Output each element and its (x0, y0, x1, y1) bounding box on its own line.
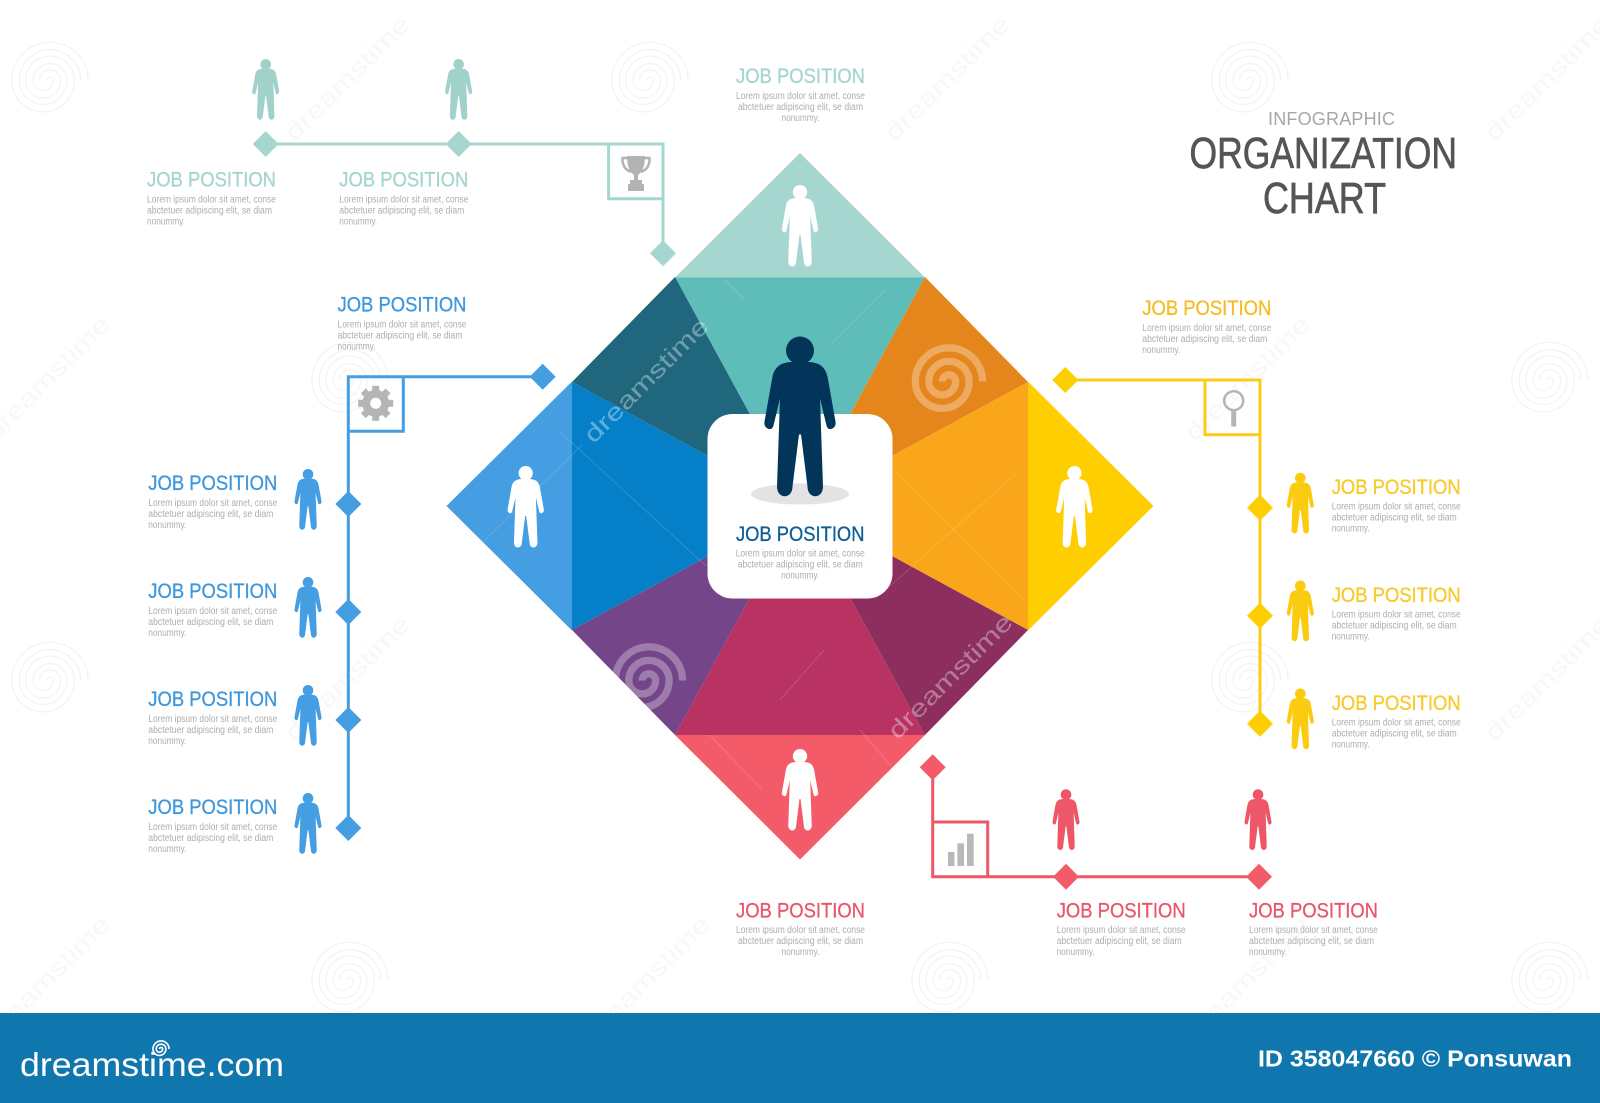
label: JOB POSITION (1142, 297, 1271, 320)
label: Lorem ipsum dolor sit amet, conse (1057, 925, 1186, 936)
label: Lorem ipsum dolor sit amet, conse (148, 822, 278, 833)
person (294, 577, 322, 638)
person shadow (751, 484, 849, 504)
label: Lorem ipsum dolor sit amet, conse (1332, 718, 1461, 728)
label: abctetuer adipiscing elit, se diam (148, 833, 273, 844)
label (339, 169, 469, 228)
label: JOB POSITION (148, 472, 277, 495)
node (650, 240, 676, 266)
node (530, 364, 556, 390)
center label: abctetuer adipiscing elit, se diam (738, 560, 863, 570)
center label (736, 523, 865, 582)
node (1246, 864, 1272, 890)
center label: nonummy. (781, 570, 819, 582)
watermark on colour: dreamstime (883, 609, 1019, 745)
top label (736, 65, 865, 124)
label: abctetuer adipiscing elit, se diam (1332, 728, 1457, 740)
label: nonummy. (338, 342, 376, 352)
person: left white (508, 466, 544, 547)
footer bar (0, 1013, 1600, 1103)
tip: yellow right (1028, 382, 1154, 630)
label: nonummy. (147, 217, 185, 228)
label: nonummy. (1332, 632, 1370, 642)
label: Lorem ipsum dolor sit amet, conse (338, 320, 467, 330)
label: abctetuer adipiscing elit, se diam (148, 509, 273, 520)
label: JOB POSITION (1057, 900, 1186, 923)
label: JOB POSITION (148, 796, 277, 819)
label (1332, 476, 1461, 534)
label: nonummy. (782, 947, 820, 958)
label (148, 580, 278, 639)
label (148, 796, 278, 855)
tip: light teal top (675, 153, 925, 278)
label: Lorem ipsum dolor sit amet, conse (1332, 502, 1461, 512)
tip: light blue left (446, 382, 572, 630)
sector: orange right (800, 382, 1028, 630)
node (446, 131, 472, 157)
label: abctetuer adipiscing elit, se diam (738, 936, 863, 947)
person (294, 469, 322, 530)
title: ORGANIZATION (1190, 129, 1457, 178)
person (252, 59, 279, 120)
label: nonummy. (148, 844, 186, 855)
node (335, 491, 361, 517)
person (1244, 789, 1272, 850)
label: nonummy. (1142, 345, 1180, 356)
top label: abctetuer adipiscing elit, se diam (738, 102, 863, 113)
center card (708, 414, 892, 598)
connector lines (266, 144, 663, 253)
sector: purple lower left (572, 506, 800, 735)
sector: blue left (572, 382, 800, 630)
label: Lorem ipsum dolor sit amet, conse (339, 195, 469, 206)
node (1247, 603, 1273, 629)
watermark pattern on white: dreamstime (280, 611, 416, 747)
label: abctetuer adipiscing elit, se diam (1332, 512, 1457, 524)
node (1247, 711, 1273, 737)
person (1287, 580, 1314, 641)
tip: coral bottom (675, 735, 925, 860)
label: abctetuer adipiscing elit, se diam (1249, 936, 1374, 947)
branch: yellow (1052, 297, 1461, 750)
person (294, 793, 322, 854)
footer credit: ID 358047660 © Ponsuwan (1258, 1046, 1572, 1072)
label: Lorem ipsum dolor sit amet, conse (736, 925, 865, 936)
label: Lorem ipsum dolor sit amet, conse (147, 195, 276, 206)
sector: crimson bottom (675, 506, 925, 735)
top label: Lorem ipsum dolor sit amet, conse (736, 91, 865, 102)
label: JOB POSITION (1332, 692, 1461, 715)
label: abctetuer adipiscing elit, se diam (1332, 620, 1457, 632)
label: nonummy. (1332, 740, 1370, 750)
person (294, 685, 322, 746)
label (1332, 584, 1461, 642)
label: JOB POSITION (148, 580, 277, 603)
label (338, 294, 467, 352)
central diamond diagram (446, 153, 1154, 860)
label: abctetuer adipiscing elit, se diam (148, 617, 273, 628)
node (1052, 367, 1078, 393)
center label: Lorem ipsum dolor sit amet, conse (736, 548, 865, 560)
label (1332, 692, 1461, 750)
connector lines (933, 767, 1259, 877)
title (1190, 109, 1457, 223)
sector: maroon lower right (800, 506, 1028, 735)
branch: teal (147, 59, 676, 266)
connector lines (1065, 380, 1260, 724)
label: nonummy. (1332, 524, 1370, 534)
person (1287, 473, 1314, 533)
person: center leader (764, 336, 836, 496)
node (1053, 864, 1079, 890)
icon: bar chart (948, 834, 974, 866)
label: abctetuer adipiscing elit, se diam (1057, 936, 1182, 947)
label: JOB POSITION (148, 688, 277, 711)
sector: orange upper right (800, 277, 1028, 506)
label: abctetuer adipiscing elit, se diam (147, 206, 272, 217)
label: Lorem ipsum dolor sit amet, conse (1332, 610, 1461, 620)
person (1052, 789, 1080, 850)
branch: blue (148, 294, 556, 855)
label: JOB POSITION (736, 900, 865, 923)
node (920, 754, 946, 780)
person (445, 59, 472, 120)
label: Lorem ipsum dolor sit amet, conse (1249, 925, 1378, 936)
watermark pattern on white: dreamstime (280, 11, 416, 147)
node (335, 707, 361, 733)
watermark pattern on white: dreamstime (580, 911, 716, 1047)
center label: JOB POSITION (736, 523, 864, 546)
watermark pattern on white: dreamstime (1480, 611, 1600, 747)
label (1057, 900, 1186, 958)
label (1142, 297, 1272, 356)
label: Lorem ipsum dolor sit amet, conse (148, 606, 278, 617)
label: JOB POSITION (339, 169, 468, 192)
branch: coral (736, 754, 1378, 958)
watermark pattern on white: dreamstime (880, 11, 1016, 147)
label: Lorem ipsum dolor sit amet, conse (148, 714, 278, 725)
top label: JOB POSITION (736, 65, 865, 88)
title: INFOGRAPHIC (1268, 109, 1395, 129)
node (253, 131, 279, 157)
label: JOB POSITION (338, 294, 466, 316)
label: nonummy. (148, 628, 186, 639)
person: top white (782, 185, 818, 266)
top label: nonummy. (782, 113, 820, 124)
label: abctetuer adipiscing elit, se diam (338, 330, 462, 342)
label: abctetuer adipiscing elit, se diam (1142, 334, 1267, 345)
title: CHART (1263, 174, 1386, 223)
footer logo: dreamstime.com (20, 1046, 284, 1083)
watermark on colour: dreamstime (579, 313, 715, 449)
watermark pattern on white: dreamstime (1480, 11, 1600, 147)
sector: dark teal upper left (572, 277, 800, 506)
label: nonummy. (1057, 947, 1095, 958)
person (1287, 688, 1314, 749)
node (335, 599, 361, 625)
watermark pattern on white: dreamstime (1180, 911, 1316, 1047)
label: nonummy. (1249, 947, 1287, 958)
label: JOB POSITION (147, 169, 276, 192)
icon: gear (358, 386, 393, 421)
label (736, 900, 865, 958)
watermark on colour (483, 280, 1028, 790)
label: Lorem ipsum dolor sit amet, conse (148, 498, 278, 509)
label: nonummy. (148, 520, 186, 531)
label (148, 688, 278, 747)
label: Lorem ipsum dolor sit amet, conse (1142, 323, 1272, 334)
person: right white (1056, 466, 1093, 547)
label: JOB POSITION (1332, 584, 1461, 607)
icon: trophy (622, 156, 650, 191)
label: nonummy. (339, 217, 377, 228)
label (1249, 900, 1378, 958)
label: nonummy. (148, 736, 186, 747)
icon: magnifier (1224, 391, 1243, 426)
node (335, 815, 361, 841)
watermark pattern on white: dreamstime (1180, 311, 1316, 447)
label: JOB POSITION (1249, 900, 1378, 923)
label (148, 472, 278, 531)
connector lines (348, 377, 543, 828)
label: abctetuer adipiscing elit, se diam (148, 725, 273, 736)
sector: teal top (675, 277, 925, 506)
label: abctetuer adipiscing elit, se diam (339, 206, 464, 217)
node (1247, 495, 1273, 521)
label (147, 169, 276, 228)
person: bottom white (782, 749, 818, 830)
label: JOB POSITION (1332, 476, 1461, 499)
